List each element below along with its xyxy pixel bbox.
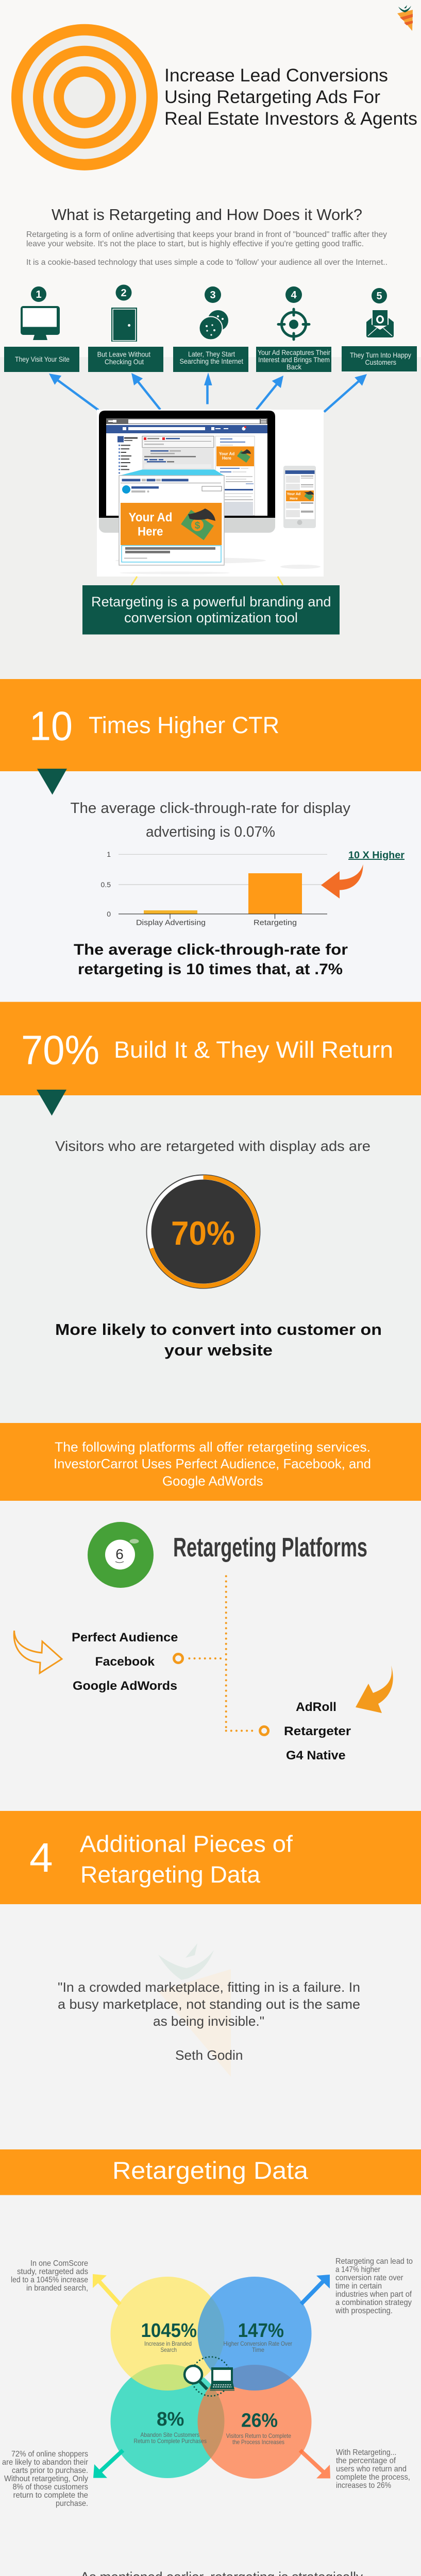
- text block: abandoned carts: 8% of those customers: [12, 2483, 88, 2492]
- callout: powerful tool: conversion optimization tool: [124, 610, 298, 625]
- step 5: money envelope icon: [366, 288, 394, 337]
- text block: users return: the percentage of: [336, 2456, 396, 2465]
- arrow: curved orange: [321, 865, 363, 899]
- list: other platforms: AdRoll: [296, 1700, 336, 1714]
- text block: definition: [26, 230, 388, 267]
- callout: powerful tool: Retargeting is a powerful branding and: [91, 594, 331, 609]
- image: retargeted ad on devices: Your Ad: [219, 452, 234, 456]
- text block: conversion rate: a combination strategy: [335, 2298, 412, 2307]
- text block: conversion rate: conversion rate over: [335, 2274, 403, 2282]
- text block: abandoned carts: 72% of online shoppers: [11, 2450, 88, 2459]
- text block: users return: With Retargeting...: [336, 2448, 397, 2457]
- heading band: build it: [0, 1002, 421, 1095]
- list: used platforms: Google AdWords: [73, 1679, 177, 1693]
- chart: venn diagram: 147%: [238, 2320, 284, 2342]
- image: retargeted ad on devices: $: [195, 520, 200, 531]
- arrow: teal: [93, 2450, 123, 2478]
- icon: number 6 ring: 6: [115, 1546, 124, 1562]
- text block: users return: increases to 26%: [336, 2481, 391, 2490]
- step 3: cookies icon: 3: [210, 290, 216, 301]
- text block: conversion rate: with prospecting.: [335, 2307, 393, 2315]
- heading band: platforms intro: InvestorCarrot Uses Perfect Audience, Facebook, and: [54, 1456, 371, 1471]
- image: retargeted ad on devices: Your Ad: [287, 493, 300, 496]
- text block: comscore study: in branded search,: [26, 2284, 88, 2293]
- step box: ad recaptures: Interest and Brings Them: [258, 355, 330, 364]
- text block: abandoned carts: Without retargeting, Only: [4, 2475, 88, 2483]
- text block: conversion rate: time in certain: [335, 2282, 382, 2291]
- marker: left ring: [174, 1654, 182, 1663]
- text block: abandoned carts: return to complete the: [13, 2491, 88, 2500]
- chart: venn diagram: 8%: [157, 2409, 184, 2430]
- heading band: retargeting data: [0, 2149, 421, 2195]
- list: used platforms: [72, 1631, 178, 1693]
- step box: they visit your site: They Visit Your Site: [15, 355, 70, 363]
- step box: they visit your site: [4, 347, 79, 372]
- step box: happy customers: They Turn Into Happy: [350, 351, 411, 359]
- list: other platforms: G4 Native: [286, 1749, 345, 1762]
- text block: conversion rate: Retargeting can lead to: [335, 2257, 413, 2266]
- step box: ad recaptures: [256, 347, 331, 372]
- text block: retargeting CTR: retargeting is 10 times that, at .7%: [78, 961, 343, 978]
- quote: Seth Godin: [58, 1979, 360, 2063]
- step 1: visit icon: 1: [36, 289, 42, 300]
- step 2: door icon: 2: [121, 287, 127, 299]
- title: [164, 65, 417, 129]
- quote: Seth Godin: as being invisible.": [153, 2013, 264, 2029]
- arrow: coral: [300, 2450, 330, 2478]
- image: retargeted ad on devices: Your Ad: [129, 511, 172, 524]
- callout: 10 x higher: 10 X Higher: [348, 850, 405, 861]
- text block: abandoned carts: purchase.: [56, 2499, 88, 2508]
- chart: venn diagram: Return to Complete Purchases: [134, 2437, 207, 2445]
- quote: Seth Godin: Seth Godin: [175, 2047, 243, 2063]
- icon: search and laptop: [184, 2357, 234, 2396]
- text block: definition: Retargeting is a form of online advertising that keeps your brand in front of "bounced" traffic after they: [26, 230, 387, 239]
- text block: display CTR: [70, 800, 351, 840]
- chart: venn diagram: the Process Increases: [232, 2438, 284, 2446]
- chart: venn diagram: Search: [161, 2346, 177, 2353]
- text block: comscore study: In one ComScore: [30, 2259, 88, 2268]
- step box: ad recaptures: Back: [287, 363, 302, 371]
- text block: retargeting CTR: The average click-through-rate for: [74, 941, 348, 958]
- heading: what is retargeting: What is Retargeting and How Does it Work?: [52, 206, 362, 224]
- icon: down triangle: [37, 769, 67, 794]
- quote: Seth Godin: "In a crowded marketplace, fitting in is a failure. In: [58, 1979, 360, 1995]
- step 4: crosshair icon: 4: [291, 290, 297, 301]
- step box: happy customers: Customers: [365, 358, 396, 366]
- text block: retargeting CTR: [74, 941, 348, 978]
- bar chart: CTR comparison: 1: [107, 850, 111, 858]
- heading band: 4 additional pieces: Retargeting Data: [80, 1861, 261, 1888]
- icon: target rings: [11, 24, 158, 171]
- step 5: money envelope icon: 5: [376, 291, 382, 302]
- text block: more likely: your website: [164, 1341, 273, 1359]
- heading band: 10 times higher: [0, 679, 421, 771]
- step box: start searching: Later, They Start: [188, 350, 235, 358]
- heading band: build it: Build It & They Will Return: [114, 1037, 393, 1063]
- heading band: 4 additional pieces: 4: [29, 1835, 53, 1880]
- heading band: platforms intro: Google AdWords: [162, 1473, 263, 1488]
- chart: venn diagram: 1045%: [141, 2320, 197, 2342]
- step 3: cookies icon: [199, 286, 228, 340]
- step box: happy customers: [342, 346, 417, 371]
- text block: comscore study: study, retargeted ads: [17, 2267, 88, 2276]
- step 1: visit icon: [21, 286, 60, 340]
- heading band: retargeting data: Retargeting Data: [112, 2157, 309, 2184]
- title: Using Retargeting Ads For: [164, 87, 380, 107]
- bar chart: CTR comparison: Retargeting: [254, 919, 297, 927]
- icon: down triangle: [37, 1090, 66, 1116]
- arrow: solid right: [356, 1665, 393, 1713]
- arrow: yellow: [93, 2274, 120, 2304]
- arrow: blue: [301, 2275, 330, 2304]
- heading band: 4 additional pieces: Additional Pieces of: [80, 1831, 293, 1857]
- text block: conversion rate: industries when part of: [335, 2290, 412, 2299]
- panel: how it works: [0, 284, 421, 679]
- text block: users return: [336, 2448, 410, 2490]
- text block: users return: users who return and: [336, 2465, 407, 2473]
- text block: comscore study: [11, 2259, 88, 2293]
- step box: start searching: [173, 347, 248, 372]
- connector: dotted timeline: [186, 1576, 257, 1731]
- text block: comscore study: led to a 1045% increase: [11, 2276, 88, 2284]
- image: retargeted ad on devices: [97, 410, 324, 577]
- bar chart: CTR comparison: [101, 850, 327, 927]
- text block: visitors: Visitors who are retargeted with display ads are: [55, 1138, 371, 1154]
- chart: venn diagram: [110, 2277, 311, 2479]
- heading band: platforms intro: The following platforms all offer retargeting services.: [55, 1439, 371, 1455]
- icon: carrot logo: [397, 5, 413, 31]
- step box: leave without checking out: But Leave Without: [97, 350, 150, 359]
- bar chart: CTR comparison: Display Advertising: [136, 919, 206, 927]
- text block: definition: It is a cookie-based technology that uses simple a code to 'follow' your audience all over the Internet..: [26, 258, 388, 267]
- bar chart: CTR comparison: 0.5: [101, 880, 111, 889]
- heading band: platforms intro: [0, 1423, 421, 1501]
- image: retargeted ad on devices: Here: [138, 525, 163, 539]
- text block: display CTR: The average click-through-rate for display: [70, 800, 351, 817]
- step box: leave without checking out: [88, 347, 163, 372]
- list: used platforms: Perfect Audience: [72, 1631, 178, 1645]
- chart: 70 percent donut: [146, 1175, 260, 1288]
- panel: hero: [0, 0, 421, 357]
- title: Real Estate Investors & Agents: [164, 109, 417, 129]
- text block: conversion rate: a 147% higher: [335, 2265, 381, 2274]
- title: Increase Lead Conversions: [164, 65, 388, 86]
- callout: powerful tool: [82, 585, 340, 635]
- list: other platforms: [284, 1700, 351, 1762]
- heading band: 4 additional pieces: [0, 1811, 421, 1904]
- chart: venn diagram: 26%: [241, 2410, 278, 2432]
- watermark: carrot: [158, 1943, 231, 2077]
- step box: ad recaptures: Your Ad Recaptures Their: [258, 348, 330, 357]
- image: retargeted ad on devices: Here: [222, 456, 231, 461]
- arrow: outline left: [14, 1631, 62, 1673]
- text block: abandoned carts: [2, 2450, 89, 2508]
- heading band: 10 times higher: 10: [29, 703, 73, 749]
- connector lines: yellow: [131, 577, 283, 585]
- panel: additional data quote: [0, 1811, 421, 2149]
- text block: more likely: [55, 1320, 382, 1359]
- icon: number 6 ring: [88, 1522, 154, 1588]
- text block: definition: leave your website. It's not the place to start, but is highly effective if you're getting good traffic.: [26, 240, 364, 248]
- panel: retargeting platforms: [0, 1423, 421, 1811]
- chart: venn diagram: Visitors Return to Complete: [226, 2432, 291, 2439]
- panel: 10 times higher CTR: [0, 679, 421, 1002]
- image: retargeted ad on devices: Here: [290, 497, 298, 501]
- chart: venn diagram: Higher Conversion Rate Over: [224, 2340, 292, 2347]
- text block: display CTR: advertising is 0.07%: [146, 824, 275, 840]
- panel: 70 percent: [0, 1002, 421, 1423]
- chart: venn diagram: Time: [252, 2346, 264, 2353]
- chart: venn diagram: Increase in Branded: [144, 2340, 192, 2347]
- list: used platforms: Facebook: [95, 1655, 155, 1669]
- text block: conversion rate: [335, 2257, 413, 2315]
- bar chart: CTR comparison: 0: [107, 910, 111, 918]
- heading band: 10 times higher: Times Higher CTR: [89, 712, 279, 738]
- step box: leave without checking out: Checking Out: [105, 358, 144, 366]
- step 4: crosshair icon: [278, 286, 309, 340]
- panel: retargeting data: [0, 2149, 421, 2576]
- text block: abandoned carts: are likely to abandon their: [2, 2458, 89, 2467]
- heading band: build it: 70%: [21, 1027, 99, 1073]
- list: other platforms: Retargeter: [284, 1724, 351, 1738]
- text block: more likely: More likely to convert into customer on: [55, 1320, 382, 1338]
- chart: 70 percent donut: 70%: [171, 1214, 235, 1252]
- step box: start searching: Searching the Internet: [179, 357, 243, 365]
- chart: venn diagram: Abandon Site Customers: [140, 2431, 199, 2438]
- text block: abandoned carts: carts prior to purchase.: [12, 2466, 88, 2475]
- quote: Seth Godin: a busy marketplace, not standing out is the same: [58, 1996, 360, 2012]
- text block: users return: complete the process,: [336, 2473, 410, 2482]
- arrows: from screen to step boxes: [49, 372, 367, 412]
- step 2: door icon: [111, 284, 137, 342]
- marker: right ring: [260, 1726, 268, 1735]
